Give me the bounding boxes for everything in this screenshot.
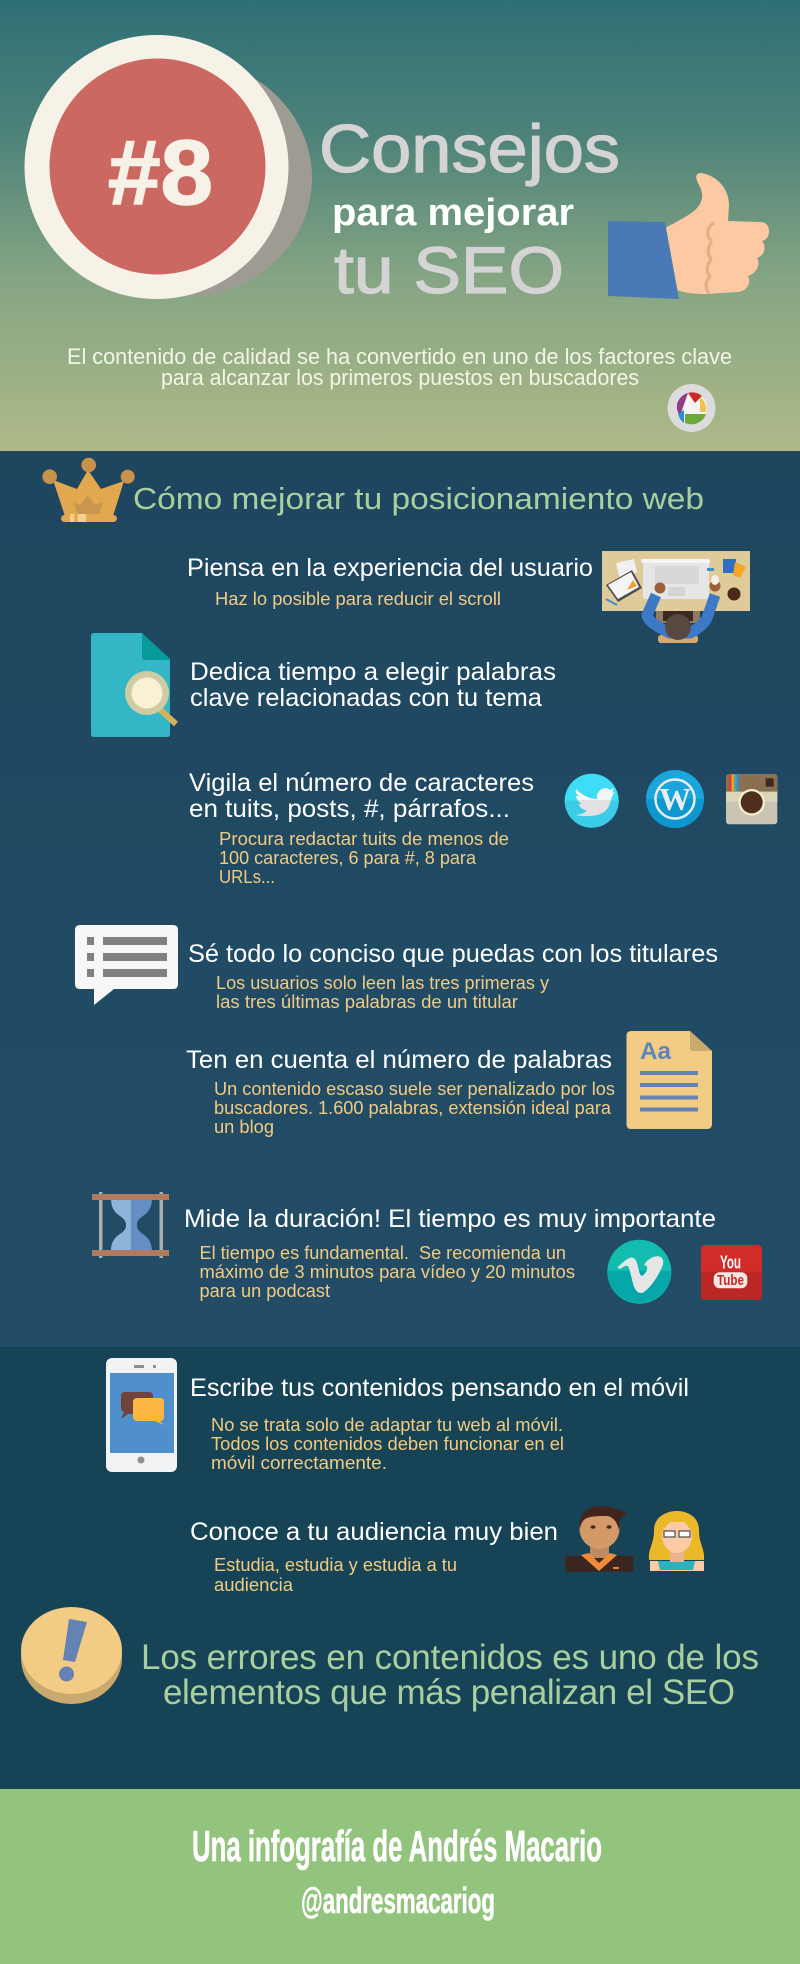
title: Consejos	[319, 111, 620, 187]
callout: errores en contenidos	[141, 1638, 759, 1712]
tip 3: numero de caracteres	[189, 769, 534, 887]
icon: Aa document	[626, 1031, 712, 1129]
tip 4: titulares: Los usuarios solo leen las tres primeras y	[216, 973, 549, 993]
heading: como mejorar: Cómo mejorar tu posicionamiento web	[133, 481, 704, 516]
badge: number 8: #8	[108, 122, 213, 224]
icon: youtube	[701, 1245, 762, 1300]
icon: hourglass	[92, 1192, 169, 1258]
intro text	[67, 344, 732, 390]
icon: speech bubble list	[75, 925, 178, 1005]
tip 7: movil	[190, 1374, 689, 1473]
intro text: El contenido de calidad se ha convertido en uno de los factores clave	[67, 344, 732, 369]
icon: youtube: You	[720, 1252, 741, 1272]
tip 7: movil: Escribe tus contenidos pensando en el móvil	[190, 1374, 689, 1402]
tip 2: palabras clave: Dedica tiempo a elegir palabras	[190, 658, 556, 686]
tip 8: audiencia: Conoce a tu audiencia muy bien	[190, 1518, 558, 1546]
title	[319, 111, 620, 307]
tip 5: numero de palabras: Un contenido escaso suele ser penalizado por los	[214, 1079, 615, 1099]
tip 7: movil: móvil correctamente.	[211, 1453, 387, 1473]
title: tu SEO	[334, 233, 564, 307]
badge: number 8	[24, 35, 312, 299]
tip 2: palabras clave: clave relacionadas con tu tema	[190, 684, 542, 712]
tip 1: experiencia del usuario: Haz lo posible para reducir el scroll	[215, 589, 501, 609]
tip 4: titulares: Sé todo lo conciso que puedas con los titulares	[188, 940, 718, 968]
tip 2: palabras clave	[190, 658, 556, 712]
tip 3: numero de caracteres: 100 caracteres, 6 para #, 8 para	[219, 848, 477, 868]
icon: exclamation badge	[21, 1607, 122, 1704]
panel: footer background	[0, 1789, 800, 1964]
panel: lower tips background	[0, 1347, 800, 1789]
icon: wordpress: W	[659, 781, 691, 817]
tip 6: duracion: El tiempo es fundamental. Se recomienda un	[200, 1243, 566, 1263]
tip 5: numero de palabras: un blog	[214, 1117, 274, 1137]
tip 5: numero de palabras: buscadores. 1.600 palabras, extensión ideal para	[214, 1098, 612, 1118]
icon: wordpress	[646, 770, 704, 828]
icon: picasa	[668, 384, 716, 432]
tip 6: duracion: para un podcast	[200, 1281, 330, 1301]
footer credit: @andresmacariog	[301, 1880, 495, 1921]
tip 7: movil: Todos los contenidos deben funcionar en el	[211, 1434, 564, 1454]
icon: crown	[42, 458, 135, 522]
icon: man avatar	[565, 1506, 633, 1572]
tip 4: titulares: las tres últimas palabras de un titular	[216, 992, 518, 1012]
tip 1: experiencia del usuario: Piensa en la experiencia del usuario	[187, 554, 593, 582]
tip 5: numero de palabras: Ten en cuenta el número de palabras	[186, 1046, 612, 1074]
panel: header background	[0, 0, 800, 451]
tip 3: numero de caracteres: en tuits, posts, #, párrafos...	[189, 795, 510, 823]
icon: instagram	[726, 774, 777, 824]
callout: errores en contenidos: Los errores en contenidos es uno de los	[141, 1638, 759, 1677]
intro text: para alcanzar los primeros puestos en buscadores	[161, 365, 639, 390]
tip 3: numero de caracteres: Vigila el número de caracteres	[189, 769, 534, 797]
icon: thumbs up	[608, 173, 769, 299]
tip 3: numero de caracteres: Procura redactar tuits de menos de	[219, 829, 509, 849]
tip 4: titulares	[188, 940, 718, 1012]
icon: person at desk	[602, 551, 750, 643]
icon: Aa document: Aa	[640, 1038, 672, 1065]
tip 6: duracion	[184, 1205, 716, 1301]
tip 6: duracion: máximo de 3 minutos para vídeo y 20 minutos	[200, 1262, 575, 1282]
icon: youtube: Tube	[717, 1272, 744, 1289]
tip 6: duracion: Mide la duración! El tiempo es muy importante	[184, 1205, 716, 1233]
tip 8: audiencia: Estudia, estudia y estudia a tu	[214, 1555, 457, 1575]
tip 8: audiencia	[190, 1518, 558, 1595]
icon: twitter	[565, 774, 619, 828]
heading: como mejorar	[42, 458, 704, 522]
tip 3: numero de caracteres: URLs...	[219, 867, 275, 887]
tip 5: numero de palabras	[186, 1046, 615, 1137]
title: para mejorar	[332, 192, 574, 234]
panel: tips background	[0, 451, 800, 1347]
callout: errores en contenidos: elementos que más penalizan el SEO	[163, 1673, 735, 1712]
icon: phone	[106, 1358, 177, 1472]
tip 1: experiencia del usuario	[187, 554, 593, 609]
tip 8: audiencia: audiencia	[214, 1575, 294, 1595]
icon: vimeo	[607, 1240, 671, 1304]
icon: document with magnifier	[91, 633, 176, 737]
icon: woman avatar	[649, 1511, 704, 1571]
tip 7: movil: No se trata solo de adaptar tu web al móvil.	[211, 1415, 563, 1435]
footer credit	[192, 1822, 602, 1921]
